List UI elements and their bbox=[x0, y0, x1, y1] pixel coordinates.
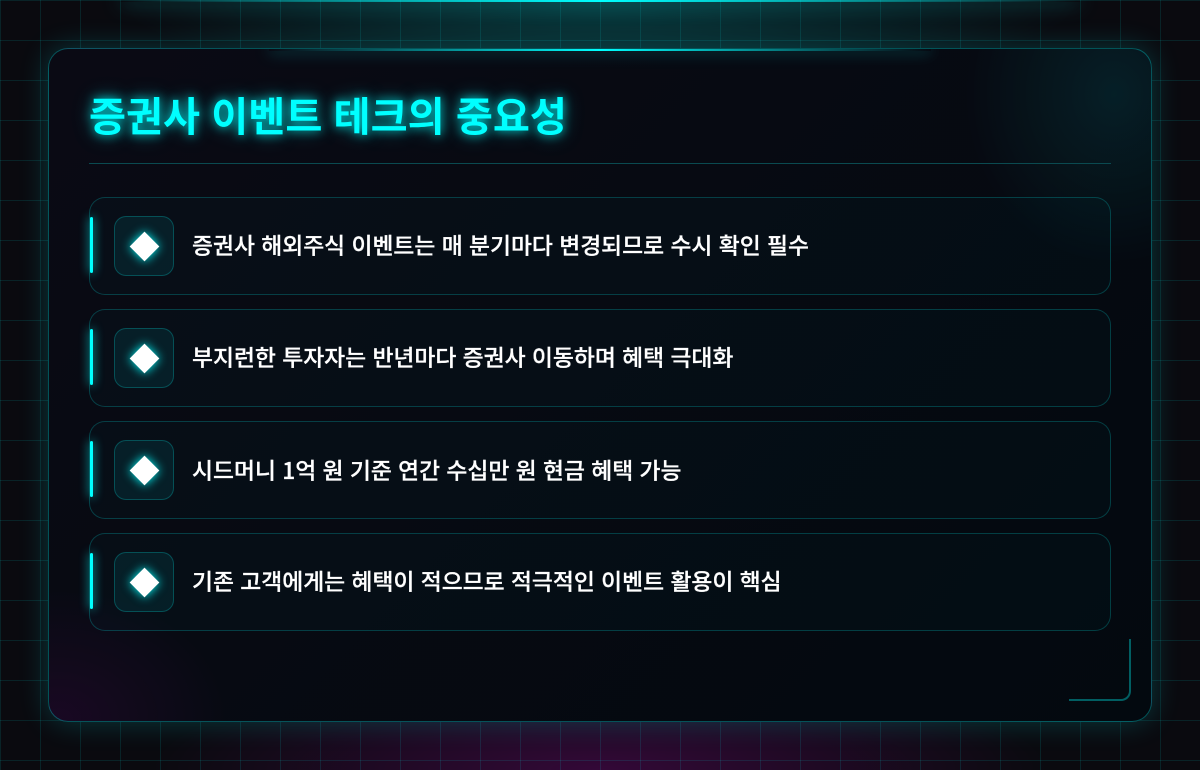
text 4: 기존 고객에게는 혜택이 적으므로 적극적인 이벤트 활용이 핵심 bbox=[192, 569, 782, 595]
panel top glow line bbox=[269, 49, 931, 51]
text 1: 증권사 해외주식 이벤트는 매 분기마다 변경되므로 수시 확인 필수 bbox=[192, 233, 809, 259]
icon: diamond 2 bbox=[114, 328, 174, 388]
text 3: 시드머니 1억 원 기준 연간 수십만 원 현금 혜택 가능 bbox=[192, 453, 681, 486]
top glow line bbox=[120, 0, 1080, 2]
accent bar 4 bbox=[90, 553, 93, 609]
icon: diamond 1 bbox=[114, 216, 174, 276]
accent bar 2 bbox=[90, 329, 93, 385]
corner accent bbox=[1069, 639, 1131, 701]
list item 4 bbox=[89, 533, 1111, 631]
accent bar 1 bbox=[90, 217, 93, 273]
title: 증권사 이벤트 테크의 중요성 bbox=[89, 95, 567, 140]
icon: diamond 4 bbox=[114, 552, 174, 612]
list item 3 bbox=[89, 421, 1111, 519]
list item 1 bbox=[89, 197, 1111, 295]
accent bar 3 bbox=[90, 441, 93, 497]
icon: diamond 3 bbox=[114, 440, 174, 500]
text 2: 부지런한 투자자는 반년마다 증권사 이동하며 혜택 극대화 bbox=[192, 345, 733, 371]
list item 2 bbox=[89, 309, 1111, 407]
